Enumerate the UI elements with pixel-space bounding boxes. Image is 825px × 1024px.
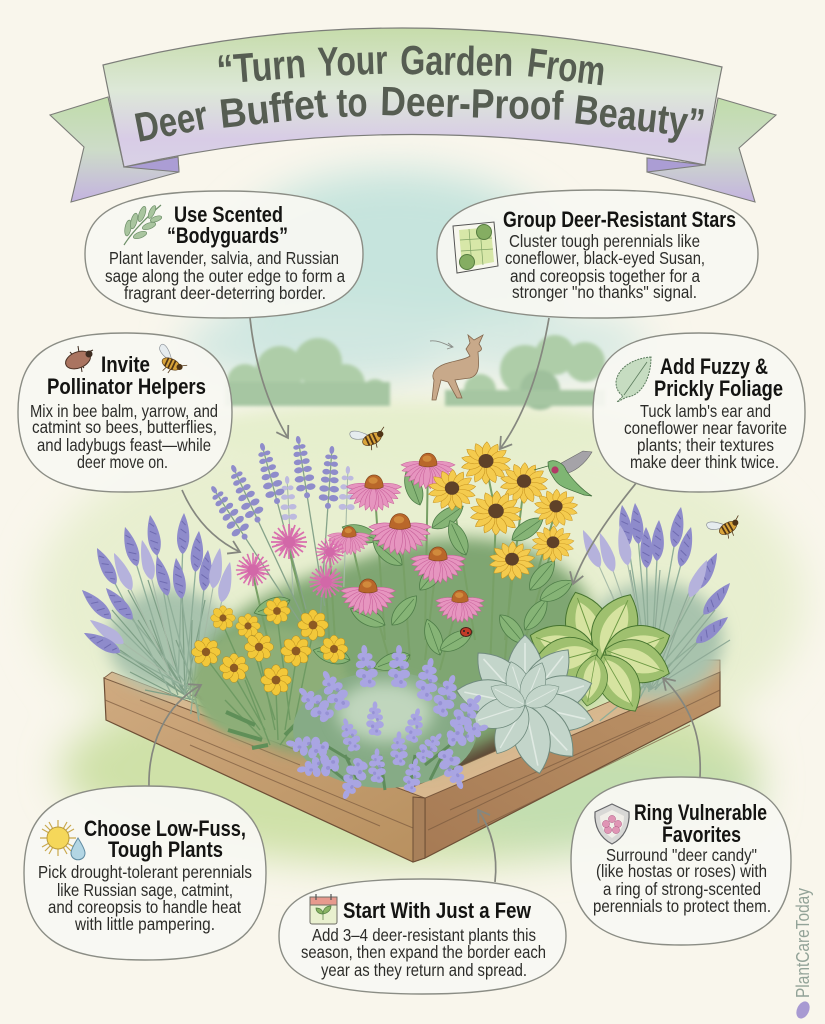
soil [190,680,560,790]
bed top rim [104,660,720,798]
arrows [149,318,700,882]
central planting foliage [192,537,600,770]
body text: stronger "no thanks" signal. [512,282,697,302]
title text [131,37,707,151]
body text: sage along the outer edge to form a [105,266,345,286]
title text: From [525,39,608,94]
heading line 2: Prickly Foliage [654,376,783,401]
icon: bee near lavender [349,418,391,456]
title text: Buffet [217,80,330,137]
body text: (like hostas or roses) with [596,861,767,881]
body text: deer move on. [77,452,168,472]
coreopsis [192,598,348,748]
body text: perennials to protect them. [593,896,771,916]
icon: deer [430,335,483,400]
heading: Add Fuzzy & [660,354,768,379]
body text: coneflower near favorite [624,418,787,438]
icon: beetle [63,346,93,372]
heading: Invite [101,352,150,377]
icon: sun and water drop [40,820,85,860]
icon: shield with flower [595,804,629,844]
icon: bee at right [706,508,746,545]
title text: Your [317,37,388,85]
icon: ladybug [460,628,472,636]
heading line 2: Pollinator Helpers [47,374,206,399]
body text: and ladybugs feast—while [37,435,211,455]
body text: with little pampering. [74,914,215,934]
banner main band [103,28,722,167]
heading: Choose Low-Fuss, [84,816,246,841]
banner tail right [647,98,776,202]
body text: and coreopsis together for a [510,266,700,286]
body text: season, then expand the border each [301,942,546,962]
title text: Deer [131,92,211,151]
body text: make deer think twice. [630,452,779,472]
icon: fuzzy leaf [616,357,651,402]
body text: year as they return and spread. [321,960,527,980]
panel: add fuzzy and prickly foliage [593,333,805,492]
body text: Add 3–4 deer-resistant plants this [312,925,536,945]
heading line 2: “Bodyguards” [167,223,288,248]
lavender clump right [578,502,735,726]
body text: Mix in bee balm, yarrow, and [30,401,218,421]
catmint mound [284,644,491,803]
panel: start with just a few [279,879,566,994]
title text: Beauty” [572,86,707,147]
lavender clump left [78,513,236,722]
title banner [50,28,776,202]
icon: calendar with sprout [310,894,337,924]
bed left face [104,678,425,862]
back lavender spikes [204,434,356,636]
coneflowers [327,453,485,623]
watermark: PlantCareToday: PlantCareToday [793,888,813,998]
icon: herb sprig [124,205,163,245]
title text: to [336,79,368,126]
body text: coneflower, black-eyed Susan, [505,248,705,268]
icon: hummingbird [534,451,592,496]
body text: Cluster tough perennials like [509,231,700,251]
title text: Deer-Proof [380,78,564,129]
heading: Start With Just a Few [343,898,532,923]
body text: a ring of strong-scented [603,879,761,899]
title text: Garden [400,37,514,85]
body text: Surround "deer candy" [606,845,757,865]
heading: Use Scented [174,202,283,227]
body text: like Russian sage, catmint, [57,880,233,900]
watercolor meadow ground [35,405,805,865]
icon: bee [151,343,191,379]
heading line 2: Favorites [662,822,741,847]
banner tail left [50,97,179,202]
distant shrubs [225,335,605,410]
stems and leaves [252,460,577,680]
body text: Plant lavender, salvia, and Russian [109,248,339,268]
hosta [523,585,677,721]
heading: Group Deer-Resistant Stars [503,207,736,232]
panel: use scented bodyguards [85,191,363,318]
heading line 2: Tough Plants [108,837,223,862]
watercolor sky wash [180,170,650,385]
bee balm [236,524,344,598]
lamb's ear [453,635,597,777]
panel: group deer-resistant stars [437,190,758,318]
body text: and coreopsis to handle heat [48,897,241,917]
raised wooden bed [104,660,720,862]
black-eyed Susans [428,442,578,581]
body text: plants; their textures [637,435,774,455]
icon: garden plan [453,222,498,273]
bed right face [425,672,720,858]
heading: Ring Vulnerable [634,800,767,825]
panel: ring vulnerable favorites [571,777,791,945]
panel: invite pollinator helpers [18,333,232,492]
body text: Tuck lamb's ear and [640,401,771,421]
body text: Pick drought-tolerant perennials [38,862,252,882]
body text: fragrant deer-deterring border. [124,283,326,303]
title text: “Turn [215,40,307,93]
panel: choose low-fuss tough plants [24,786,266,960]
body text: catmint so bees, butterflies, [32,417,217,437]
